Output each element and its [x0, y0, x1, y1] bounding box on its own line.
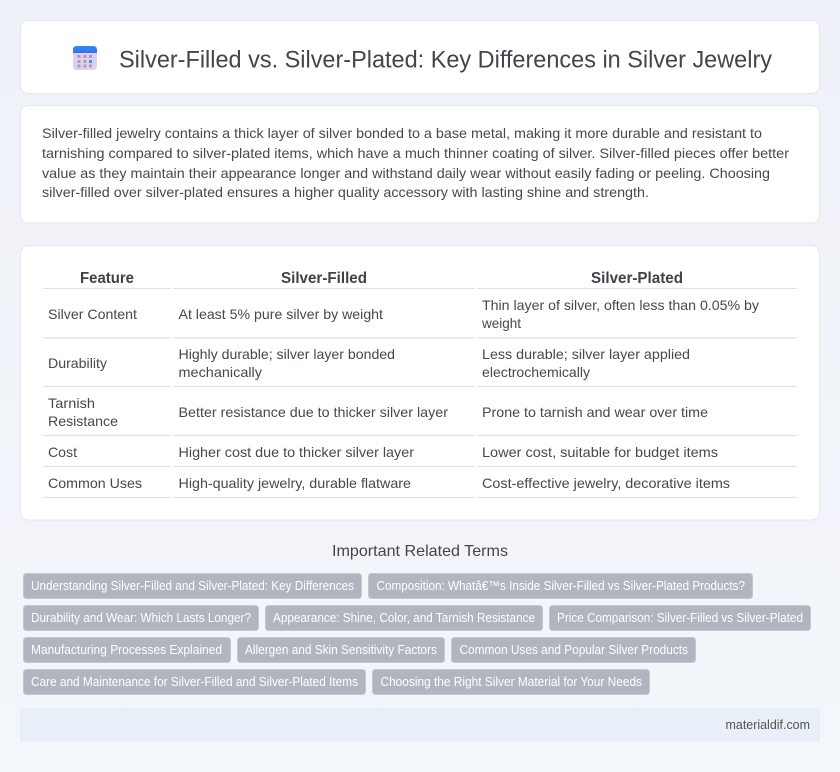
- tag: manufacturing: [24, 638, 230, 662]
- table header row: Silver-Plated: [591, 270, 683, 287]
- tag: common uses: [452, 638, 696, 662]
- tag: composition: Composition: Whatâ€™s Inside Silver-Filled vs Silver-Plated Products?: [376, 579, 745, 593]
- table row: common uses: Common Uses: [48, 475, 142, 491]
- table row: tarnish resistance: Resistance: [48, 413, 118, 429]
- table row: durability: [48, 346, 690, 380]
- tag: key differences: Understanding Silver-Filled and Silver-Plated: Key Differences: [31, 579, 354, 593]
- tag: durability and wear: [24, 606, 258, 630]
- table header row: [80, 270, 683, 287]
- footer site name: materialdif.com: [726, 717, 810, 732]
- tag: appearance: Appearance: Shine, Color, and Tarnish Resistance: [273, 611, 535, 625]
- panel: header: [20, 20, 820, 94]
- table row: silver content: weight: [481, 315, 521, 331]
- table row: durability: electrochemically: [482, 364, 590, 380]
- table row: durability: Less durable; silver layer applied: [482, 346, 690, 362]
- table row: cost: Higher cost due to thicker silver layer: [178, 444, 414, 460]
- heading: important related terms: Important Related Terms: [332, 543, 508, 560]
- tag: common uses: Common Uses and Popular Silver Products: [460, 643, 688, 657]
- table row: silver content: At least 5% pure silver by weight: [178, 306, 383, 322]
- text block: introduction paragraph: Silver-filled jewelry contains a thick layer of silver bonded to a base metal, making it more durable and resistant to: [42, 125, 762, 141]
- table row: common uses: [48, 475, 730, 491]
- text block: introduction paragraph: tarnishing compared to silver-plated items, which have a much thinner coating of silver. Silver-filled pieces offer better: [42, 145, 789, 161]
- tag: choosing the right material: [372, 670, 650, 694]
- table row: durability: Highly durable; silver layer bonded: [178, 346, 395, 362]
- tag: manufacturing: Manufacturing Processes Explained: [31, 643, 222, 657]
- tag: price comparison: Price Comparison: Silver-Filled vs Silver-Plated: [557, 611, 803, 625]
- table row: silver content: [48, 297, 759, 331]
- tag: allergen: [238, 638, 444, 662]
- tag: choosing the right material: Choosing the Right Silver Material for Your Needs: [380, 675, 642, 689]
- table row: silver content: Thin layer of silver, often less than 0.05% by: [482, 297, 759, 313]
- tag: care and maintenance: [24, 670, 366, 694]
- tag: appearance: [266, 606, 542, 630]
- table row: cost: [48, 444, 718, 460]
- related terms tags: [24, 574, 810, 694]
- tag: durability and wear: Durability and Wear: Which Lasts Longer?: [31, 611, 251, 625]
- title: Silver-Filled vs. Silver-Plated: Key Differences in Silver Jewelry: [119, 46, 772, 74]
- table row: durability: Durability: [48, 355, 107, 371]
- table row: cost: Cost: [48, 444, 77, 460]
- table row: cost: Lower cost, suitable for budget items: [482, 444, 718, 460]
- tag: allergen: Allergen and Skin Sensitivity Factors: [245, 643, 437, 657]
- table header row: Silver-Filled: [281, 270, 367, 287]
- table row: common uses: Cost-effective jewelry, decorative items: [482, 475, 730, 491]
- tag: care and maintenance: Care and Maintenance for Silver-Filled and Silver-Plated Items: [31, 675, 358, 689]
- table row: tarnish resistance: Prone to tarnish and wear over time: [482, 404, 708, 420]
- table row: tarnish resistance: Better resistance due to thicker silver layer: [178, 404, 448, 420]
- tag: composition: [368, 574, 752, 598]
- table row: durability: mechanically: [178, 364, 262, 380]
- table row: silver content: Silver Content: [48, 306, 137, 322]
- text block: introduction paragraph: [42, 125, 789, 200]
- text block: introduction paragraph: silver-filled over silver-plated ensures a higher quality accessory with lasting shine and strength.: [42, 184, 649, 200]
- tag: price comparison: [550, 606, 810, 630]
- table row: common uses: High-quality jewelry, durable flatware: [178, 475, 411, 491]
- tag: key differences: [24, 574, 362, 598]
- icon: calendar: [73, 46, 97, 70]
- footer: [20, 708, 820, 742]
- table row: tarnish resistance: [48, 395, 708, 429]
- panel: introduction: [20, 106, 820, 223]
- text block: introduction paragraph: value as they maintain their appearance longer and withstand daily wear without easily fading or peeling. Choosing: [42, 165, 770, 181]
- table header row: Feature: [80, 270, 134, 287]
- panel: comparison table: [20, 246, 820, 520]
- table row: tarnish resistance: Tarnish: [48, 395, 95, 411]
